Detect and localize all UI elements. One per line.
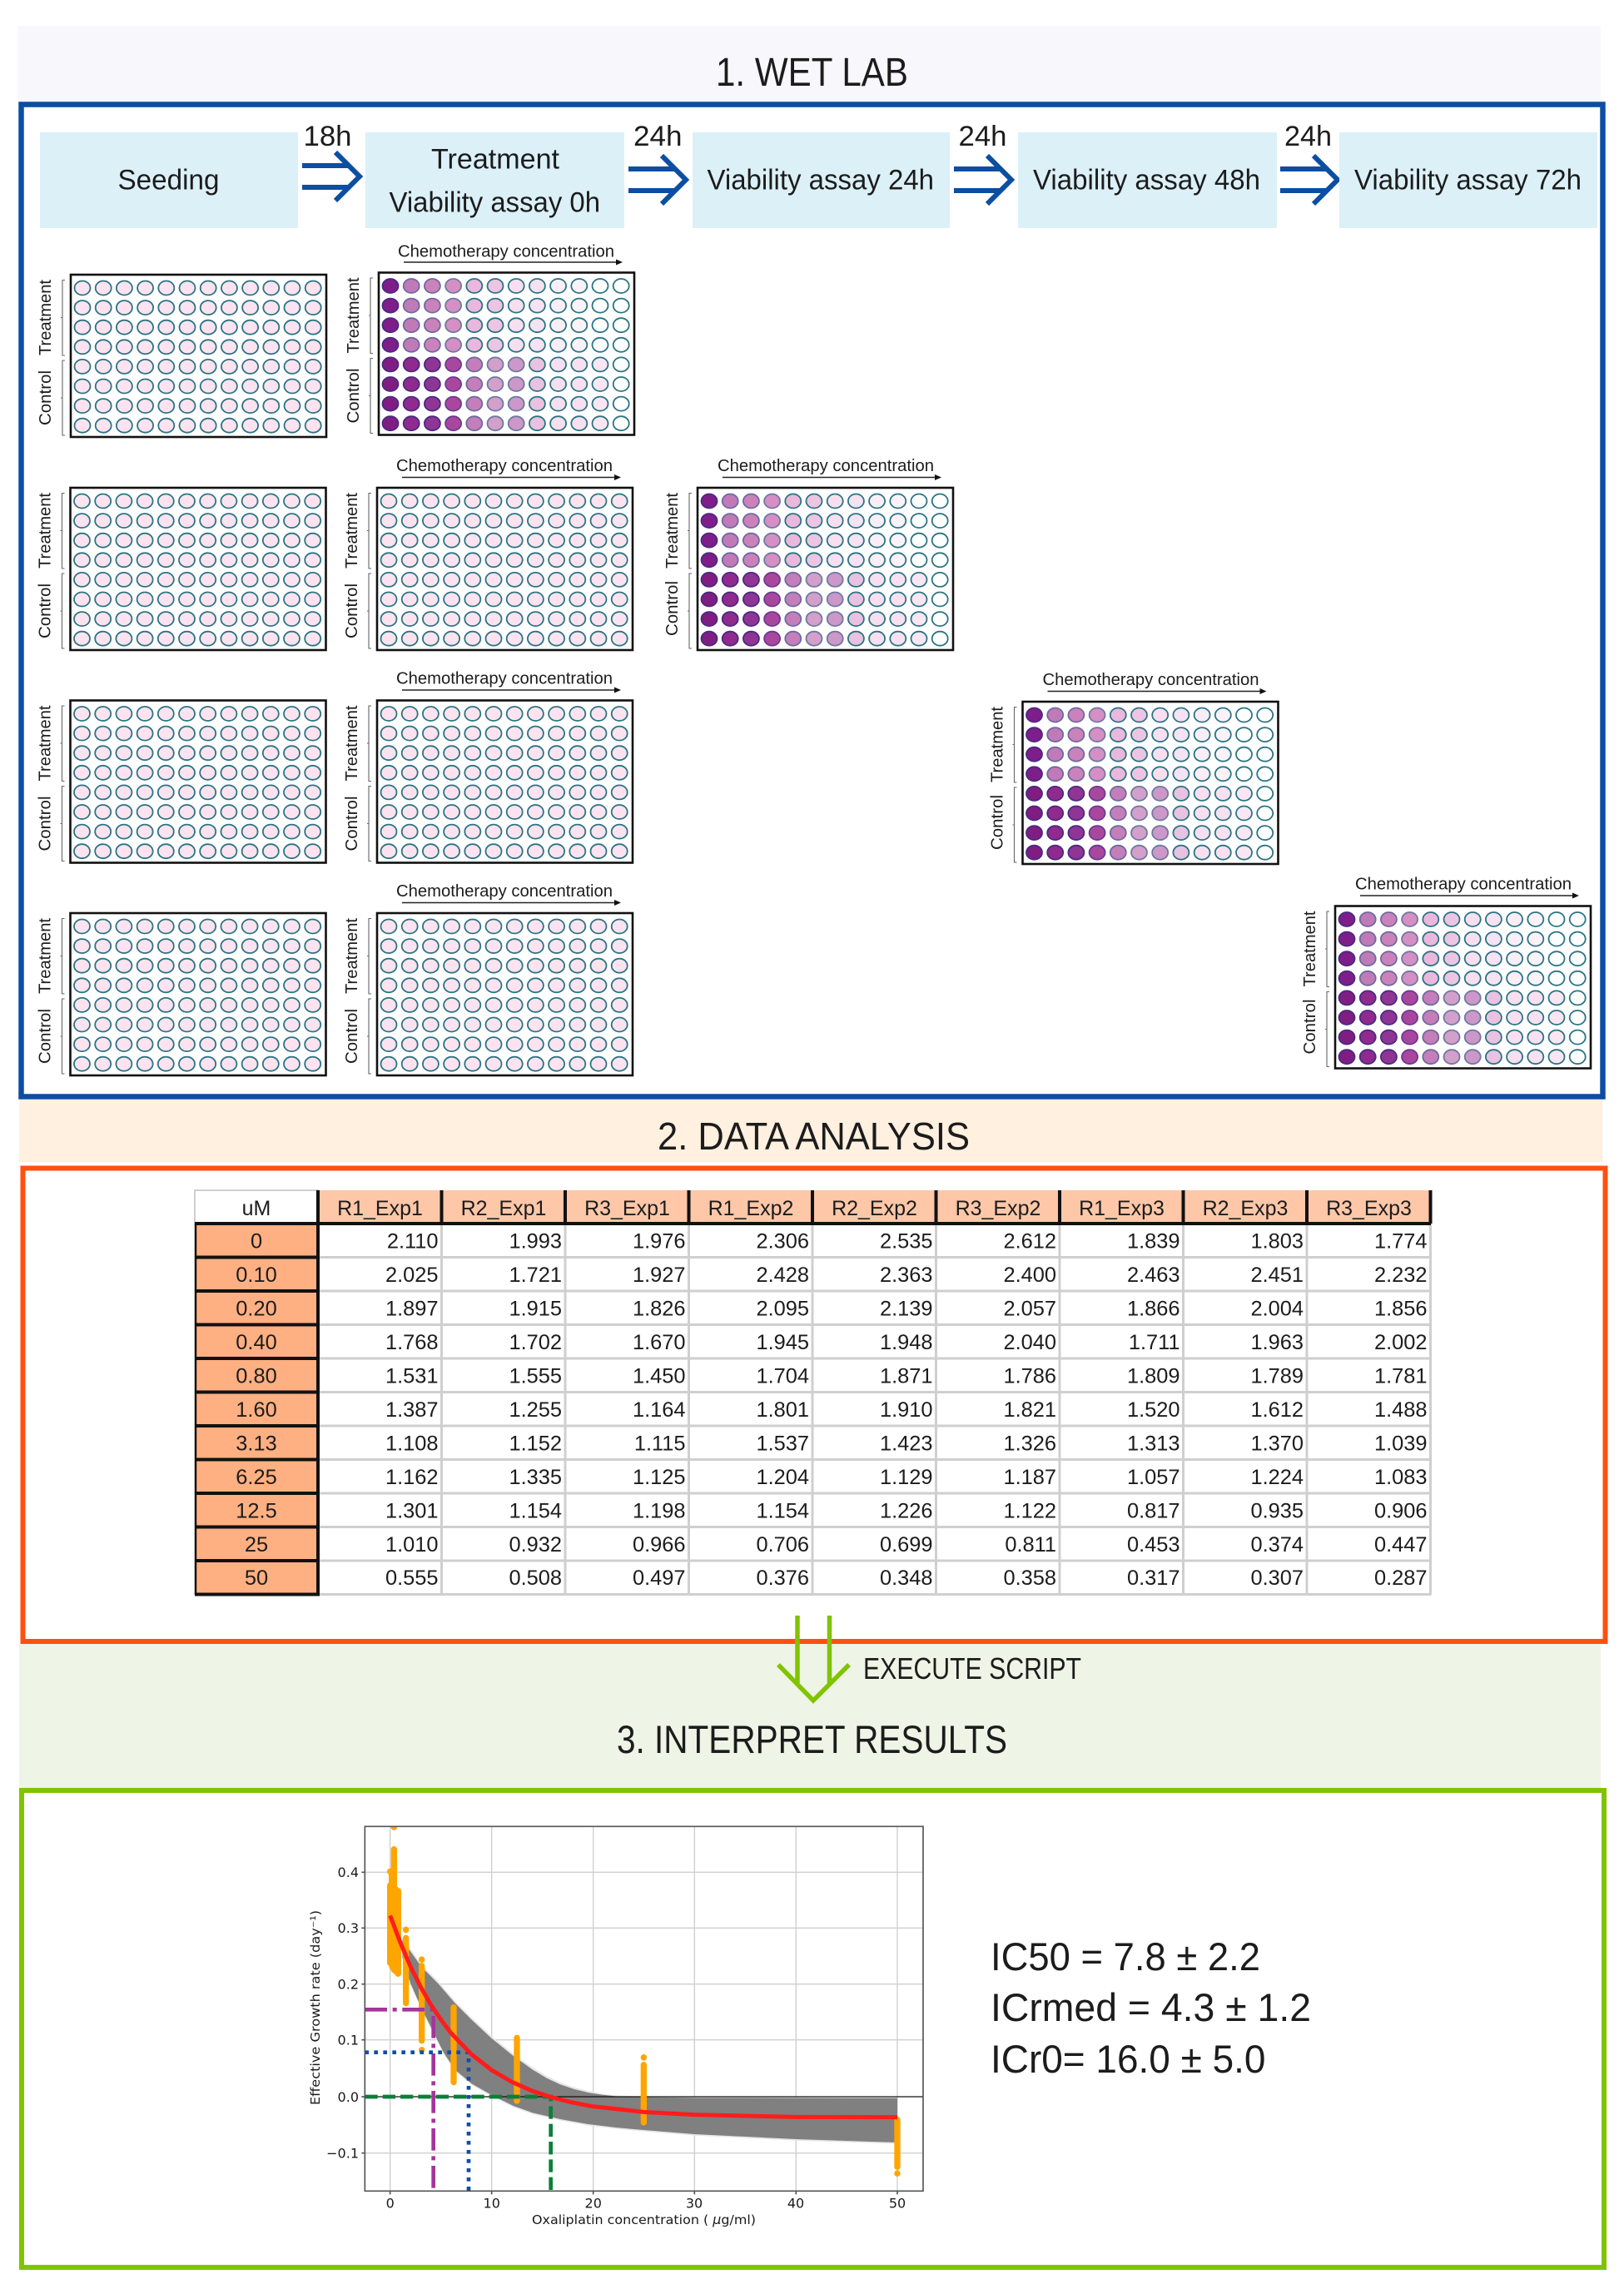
table values: 0.555 bbox=[385, 1567, 438, 1590]
table values: 1.010 bbox=[385, 1533, 438, 1557]
heading: 2. data analysis: 2. DATA ANALYSIS bbox=[658, 1115, 970, 1158]
table values: 0.906 bbox=[1374, 1500, 1427, 1523]
table concentration column: 25 bbox=[245, 1533, 268, 1557]
plate: treatment, row 3 bbox=[343, 669, 633, 862]
arrow: 24h to third assay: 24h bbox=[1284, 121, 1332, 152]
table values: 0.932 bbox=[509, 1533, 562, 1557]
table values: 1.910 bbox=[880, 1398, 932, 1422]
table values: 2.139 bbox=[880, 1297, 932, 1320]
table values: 1.803 bbox=[1250, 1230, 1304, 1254]
header band: wet lab bbox=[18, 26, 1601, 102]
table values: 1.198 bbox=[633, 1500, 686, 1523]
y axis tick labels bbox=[326, 1864, 359, 2161]
process step: viability assay 72h: Viability assay 72h bbox=[1354, 165, 1582, 196]
plate: viability assay 24h with stained wells: Chemotherapy concentration bbox=[718, 457, 934, 475]
table values: 2.002 bbox=[1374, 1331, 1427, 1354]
table values: 1.555 bbox=[509, 1365, 562, 1388]
y axis tick labels: 0.0 bbox=[338, 2089, 359, 2105]
plate: seeding, row 2: Control bbox=[37, 583, 55, 638]
table values: 1.945 bbox=[756, 1331, 809, 1354]
table values: 1.786 bbox=[1003, 1365, 1056, 1388]
plate: viability assay 48h with stained wells: Treatment bbox=[989, 707, 1007, 782]
plate: seeding, row 3: Treatment bbox=[37, 705, 55, 781]
x axis tick labels: 30 bbox=[686, 2196, 703, 2211]
table values: 1.301 bbox=[385, 1500, 438, 1523]
table values: 1.057 bbox=[1127, 1466, 1180, 1489]
table values: 0.317 bbox=[1127, 1567, 1180, 1590]
table values: 2.110 bbox=[387, 1230, 438, 1254]
table concentration column: 0.40 bbox=[236, 1331, 277, 1354]
plate: seeding, row 1 bbox=[37, 275, 326, 437]
header band: data analysis bbox=[19, 1100, 1602, 1162]
arrow: 24h to first assay bbox=[628, 121, 686, 204]
plate: treatment, row 4: Chemotherapy concentration bbox=[396, 882, 613, 901]
panel: data analysis bbox=[23, 1169, 1605, 1641]
table values: 1.774 bbox=[1374, 1230, 1427, 1254]
plate: treatment, row 2: Treatment bbox=[343, 493, 361, 569]
table values: 1.871 bbox=[880, 1365, 932, 1388]
table values: 2.612 bbox=[1003, 1230, 1056, 1254]
x axis tick labels: 0 bbox=[386, 2196, 395, 2211]
plate: treatment, row 4: Control bbox=[343, 1009, 361, 1064]
process step: treatment and viability assay 0h: Treatment bbox=[431, 143, 560, 175]
table values: 1.927 bbox=[633, 1264, 686, 1287]
table values: 1.187 bbox=[1003, 1466, 1056, 1489]
table header labels: R2_Exp1 bbox=[461, 1197, 546, 1220]
plate: treatment 0h with stained wells: Control bbox=[345, 368, 363, 423]
table values: 2.004 bbox=[1250, 1297, 1304, 1320]
process step: treatment and viability assay 0h: Viability assay 0h bbox=[390, 186, 600, 218]
plate: seeding, row 2 bbox=[37, 488, 326, 650]
blue dotted IC50 lines bbox=[365, 2053, 469, 2191]
table values: 1.537 bbox=[756, 1432, 809, 1455]
table concentration column: 0.80 bbox=[236, 1365, 277, 1388]
arrow: 18h: 18h bbox=[303, 121, 351, 152]
table values: 1.789 bbox=[1250, 1365, 1304, 1388]
table concentration column: 50 bbox=[245, 1567, 268, 1590]
table concentration column bbox=[236, 1230, 277, 1590]
grey model ensemble band bbox=[402, 1937, 897, 2144]
table values: 0.376 bbox=[756, 1567, 809, 1590]
plate: treatment 0h with stained wells: Chemotherapy concentration bbox=[398, 243, 614, 261]
table values: 1.768 bbox=[385, 1331, 438, 1354]
table values: 0.358 bbox=[1003, 1567, 1056, 1590]
plate: treatment 0h with stained wells: Treatment bbox=[345, 277, 363, 353]
plate: viability assay 72h with stained wells: Treatment bbox=[1301, 911, 1319, 987]
panel: wet lab bbox=[22, 105, 1603, 1097]
heading: 1. wet lab: 1. WET LAB bbox=[716, 51, 908, 95]
table values: 2.095 bbox=[756, 1297, 809, 1320]
plate: treatment, row 2 bbox=[343, 457, 633, 650]
table values: 1.856 bbox=[1374, 1297, 1427, 1320]
table values: 1.226 bbox=[880, 1500, 932, 1523]
table concentration column: 0 bbox=[251, 1230, 262, 1254]
table values: 0.447 bbox=[1374, 1533, 1427, 1557]
table header labels: R2_Exp2 bbox=[832, 1197, 917, 1220]
table header labels: R3_Exp1 bbox=[584, 1197, 670, 1220]
plate: treatment, row 3: Control bbox=[343, 796, 361, 851]
process step: viability assay 24h bbox=[693, 132, 950, 228]
table values: 1.154 bbox=[509, 1500, 562, 1523]
header band: interpret results bbox=[19, 1644, 1601, 1788]
green dashed ICr0 lines bbox=[365, 2097, 551, 2191]
arrow: 18h bbox=[302, 121, 360, 201]
plate: viability assay 48h with stained wells: Control bbox=[989, 795, 1007, 850]
x axis tick labels: 20 bbox=[585, 2196, 602, 2211]
table concentration column: 0.20 bbox=[236, 1297, 277, 1320]
table grid bbox=[195, 1190, 1431, 1596]
table values: 0.966 bbox=[633, 1533, 686, 1557]
process step: treatment and viability assay 0h bbox=[365, 132, 624, 228]
zero reference line bbox=[365, 2095, 923, 2098]
table values bbox=[385, 1230, 1427, 1590]
plate: seeding, row 4: Treatment bbox=[37, 918, 55, 994]
plate: treatment 0h with stained wells bbox=[345, 243, 634, 434]
table header labels: R2_Exp3 bbox=[1203, 1197, 1288, 1220]
table values: 2.463 bbox=[1127, 1264, 1180, 1287]
chart plot area bbox=[361, 1826, 923, 2194]
table values: 2.025 bbox=[385, 1264, 438, 1287]
table values: 1.963 bbox=[1250, 1331, 1304, 1354]
table values: 2.306 bbox=[756, 1230, 809, 1254]
table values: 0.508 bbox=[509, 1567, 562, 1590]
table values: 0.935 bbox=[1250, 1500, 1304, 1523]
table header labels bbox=[242, 1197, 1412, 1220]
table values: 1.612 bbox=[1250, 1398, 1304, 1422]
x axis tick labels: 10 bbox=[484, 2196, 500, 2211]
panel: interpret results bbox=[22, 1790, 1604, 2267]
table header labels: R1_Exp2 bbox=[708, 1197, 793, 1220]
table values: 1.335 bbox=[509, 1466, 562, 1489]
table header labels: R3_Exp2 bbox=[956, 1197, 1040, 1220]
plate: seeding, row 4: Control bbox=[37, 1009, 55, 1064]
x axis tick labels: 40 bbox=[787, 2196, 804, 2211]
table values: 1.781 bbox=[1374, 1365, 1427, 1388]
table values: 1.387 bbox=[385, 1398, 438, 1422]
result: ICr0: ICr0= 16.0 ± 5.0 bbox=[991, 2037, 1265, 2081]
plate: viability assay 72h with stained wells: Control bbox=[1301, 999, 1319, 1054]
arrow: execute script bbox=[778, 1616, 849, 1701]
y axis tick labels: 0.1 bbox=[338, 2033, 359, 2048]
y axis tick labels: 0.2 bbox=[338, 1976, 359, 1993]
table values: 1.450 bbox=[633, 1365, 686, 1388]
table values: 2.535 bbox=[880, 1230, 932, 1254]
table values: 1.809 bbox=[1127, 1365, 1180, 1388]
table values: 0.817 bbox=[1127, 1500, 1180, 1523]
table values: 1.108 bbox=[385, 1432, 438, 1455]
process step: seeding bbox=[40, 132, 298, 228]
table values: 1.821 bbox=[1003, 1398, 1056, 1422]
plate: treatment, row 3: Chemotherapy concentration bbox=[396, 669, 613, 688]
table values: 0.307 bbox=[1250, 1567, 1304, 1590]
table values: 1.721 bbox=[509, 1264, 562, 1287]
heading: 3. interpret results: 3. INTERPRET RESULTS bbox=[617, 1717, 1007, 1761]
y axis tick labels: 0.4 bbox=[338, 1864, 359, 1880]
table values: 1.866 bbox=[1127, 1297, 1180, 1320]
table values: 0.699 bbox=[880, 1533, 932, 1557]
process step: viability assay 48h bbox=[1018, 132, 1277, 228]
table values: 2.400 bbox=[1003, 1264, 1056, 1287]
process step: viability assay 48h: Viability assay 48h bbox=[1033, 165, 1260, 196]
table values: 1.897 bbox=[385, 1297, 438, 1320]
x axis tick labels: 50 bbox=[889, 2196, 906, 2211]
table values: 1.154 bbox=[756, 1500, 809, 1523]
data table bbox=[195, 1190, 1431, 1596]
table values: 1.162 bbox=[385, 1466, 438, 1489]
y axis title: Effective Growth rate (day⁻¹) bbox=[308, 1910, 323, 2105]
plate: treatment, row 2: Chemotherapy concentration bbox=[396, 457, 613, 475]
table values: 2.428 bbox=[756, 1264, 809, 1287]
table values: 1.039 bbox=[1374, 1432, 1427, 1455]
table values: 1.129 bbox=[880, 1466, 932, 1489]
table values: 1.948 bbox=[880, 1331, 932, 1354]
process step: viability assay 24h: Viability assay 24h bbox=[708, 165, 934, 196]
table header labels: R1_Exp3 bbox=[1079, 1197, 1165, 1220]
table values: 1.976 bbox=[633, 1230, 686, 1254]
table values: 1.313 bbox=[1127, 1432, 1180, 1455]
table values: 2.363 bbox=[880, 1264, 932, 1287]
table values: 0.811 bbox=[1005, 1533, 1056, 1557]
table values: 1.702 bbox=[509, 1331, 562, 1354]
table values: 0.453 bbox=[1127, 1533, 1180, 1557]
table values: 0.348 bbox=[880, 1567, 932, 1590]
plate: seeding, row 1: Treatment bbox=[37, 280, 55, 355]
red fitted curve bbox=[390, 1915, 897, 2118]
orange data points bbox=[390, 1827, 897, 2173]
arrow: 24h to second assay: 24h bbox=[959, 121, 1007, 152]
result: IC50: IC50 = 7.8 ± 2.2 bbox=[991, 1934, 1260, 1979]
label: execute script: EXECUTE SCRIPT bbox=[863, 1651, 1081, 1686]
table values: 1.370 bbox=[1250, 1432, 1304, 1455]
table values: 1.826 bbox=[633, 1297, 686, 1320]
table header labels: R3_Exp3 bbox=[1326, 1197, 1412, 1220]
table values: 2.232 bbox=[1374, 1264, 1427, 1287]
table values: 0.287 bbox=[1374, 1567, 1427, 1590]
table values: 1.224 bbox=[1250, 1466, 1304, 1489]
table values: 1.704 bbox=[756, 1365, 809, 1388]
table values: 1.164 bbox=[633, 1398, 686, 1422]
plate: treatment, row 4: Treatment bbox=[343, 918, 361, 994]
y axis tick labels: −0.1 bbox=[326, 2146, 359, 2161]
table concentration column: 6.25 bbox=[236, 1466, 277, 1489]
table concentration column: 12.5 bbox=[236, 1500, 277, 1523]
arrow: 24h to second assay bbox=[954, 121, 1011, 204]
plate: seeding, row 3 bbox=[37, 701, 326, 862]
table values: 1.125 bbox=[633, 1466, 686, 1489]
table values: 1.204 bbox=[756, 1466, 809, 1489]
table values: 1.115 bbox=[634, 1432, 686, 1455]
plate: viability assay 72h with stained wells bbox=[1301, 876, 1591, 1069]
table values: 1.839 bbox=[1127, 1230, 1180, 1254]
table concentration column: 1.60 bbox=[236, 1398, 277, 1422]
table values: 2.040 bbox=[1003, 1331, 1056, 1354]
table values: 2.057 bbox=[1003, 1297, 1056, 1320]
x axis tick labels bbox=[386, 2196, 906, 2211]
plate: treatment, row 2: Control bbox=[343, 583, 361, 638]
plate: viability assay 24h with stained wells bbox=[663, 457, 953, 650]
y axis tick labels: 0.3 bbox=[338, 1920, 359, 1936]
plate: seeding, row 4 bbox=[37, 913, 326, 1075]
table header labels: R1_Exp1 bbox=[337, 1197, 423, 1220]
table values: 1.711 bbox=[1129, 1331, 1180, 1354]
table values: 1.152 bbox=[509, 1432, 562, 1455]
table values: 1.122 bbox=[1003, 1500, 1056, 1523]
table values: 1.326 bbox=[1003, 1432, 1056, 1455]
chart grid lines bbox=[365, 1826, 923, 2191]
chart: effective growth rate versus oxaliplatin concentration bbox=[308, 1826, 923, 2227]
arrow: 24h to third assay bbox=[1280, 121, 1338, 204]
plate: viability assay 48h with stained wells: Chemotherapy concentration bbox=[1042, 671, 1259, 689]
results text bbox=[991, 1934, 1311, 2081]
table values: 1.801 bbox=[756, 1398, 809, 1422]
plate: treatment, row 3: Treatment bbox=[343, 705, 361, 781]
table concentration column: 3.13 bbox=[236, 1432, 277, 1455]
x axis title: Oxaliplatin concentration ( μg/ml) bbox=[532, 2212, 756, 2227]
plate: seeding, row 1: Control bbox=[37, 370, 55, 425]
table values: 2.451 bbox=[1250, 1264, 1304, 1287]
table values: 1.520 bbox=[1127, 1398, 1180, 1422]
table header labels: uM bbox=[242, 1197, 271, 1220]
table values: 0.706 bbox=[756, 1533, 809, 1557]
plate: viability assay 72h with stained wells: Chemotherapy concentration bbox=[1355, 876, 1572, 894]
plate: treatment, row 4 bbox=[343, 882, 633, 1075]
result: ICrmed: ICrmed = 4.3 ± 1.2 bbox=[991, 1985, 1311, 2029]
plate: viability assay 48h with stained wells bbox=[989, 671, 1279, 864]
process step: seeding: Seeding bbox=[118, 165, 220, 196]
table values: 1.915 bbox=[509, 1297, 562, 1320]
plate: seeding, row 3: Control bbox=[37, 796, 55, 851]
table concentration column: 0.10 bbox=[236, 1264, 277, 1287]
table values: 1.083 bbox=[1374, 1466, 1427, 1489]
purple dash-dot ICrmed lines bbox=[365, 2009, 434, 2191]
process step: viability assay 72h bbox=[1339, 132, 1597, 228]
table values: 1.488 bbox=[1374, 1398, 1427, 1422]
plate: viability assay 24h with stained wells: Treatment bbox=[663, 493, 682, 569]
plate: viability assay 24h with stained wells: Control bbox=[663, 581, 682, 636]
chart axes frame and ticks bbox=[361, 1826, 923, 2194]
arrow: 24h to first assay: 24h bbox=[633, 121, 683, 152]
table values: 1.993 bbox=[509, 1230, 562, 1254]
table values: 1.255 bbox=[509, 1398, 562, 1422]
plate: seeding, row 2: Treatment bbox=[37, 493, 55, 569]
table values: 1.423 bbox=[880, 1432, 932, 1455]
table values: 0.374 bbox=[1250, 1533, 1304, 1557]
table values: 0.497 bbox=[633, 1567, 686, 1590]
table values: 1.670 bbox=[633, 1331, 686, 1354]
table values: 1.531 bbox=[385, 1365, 438, 1388]
table header fills bbox=[195, 1190, 1431, 1595]
